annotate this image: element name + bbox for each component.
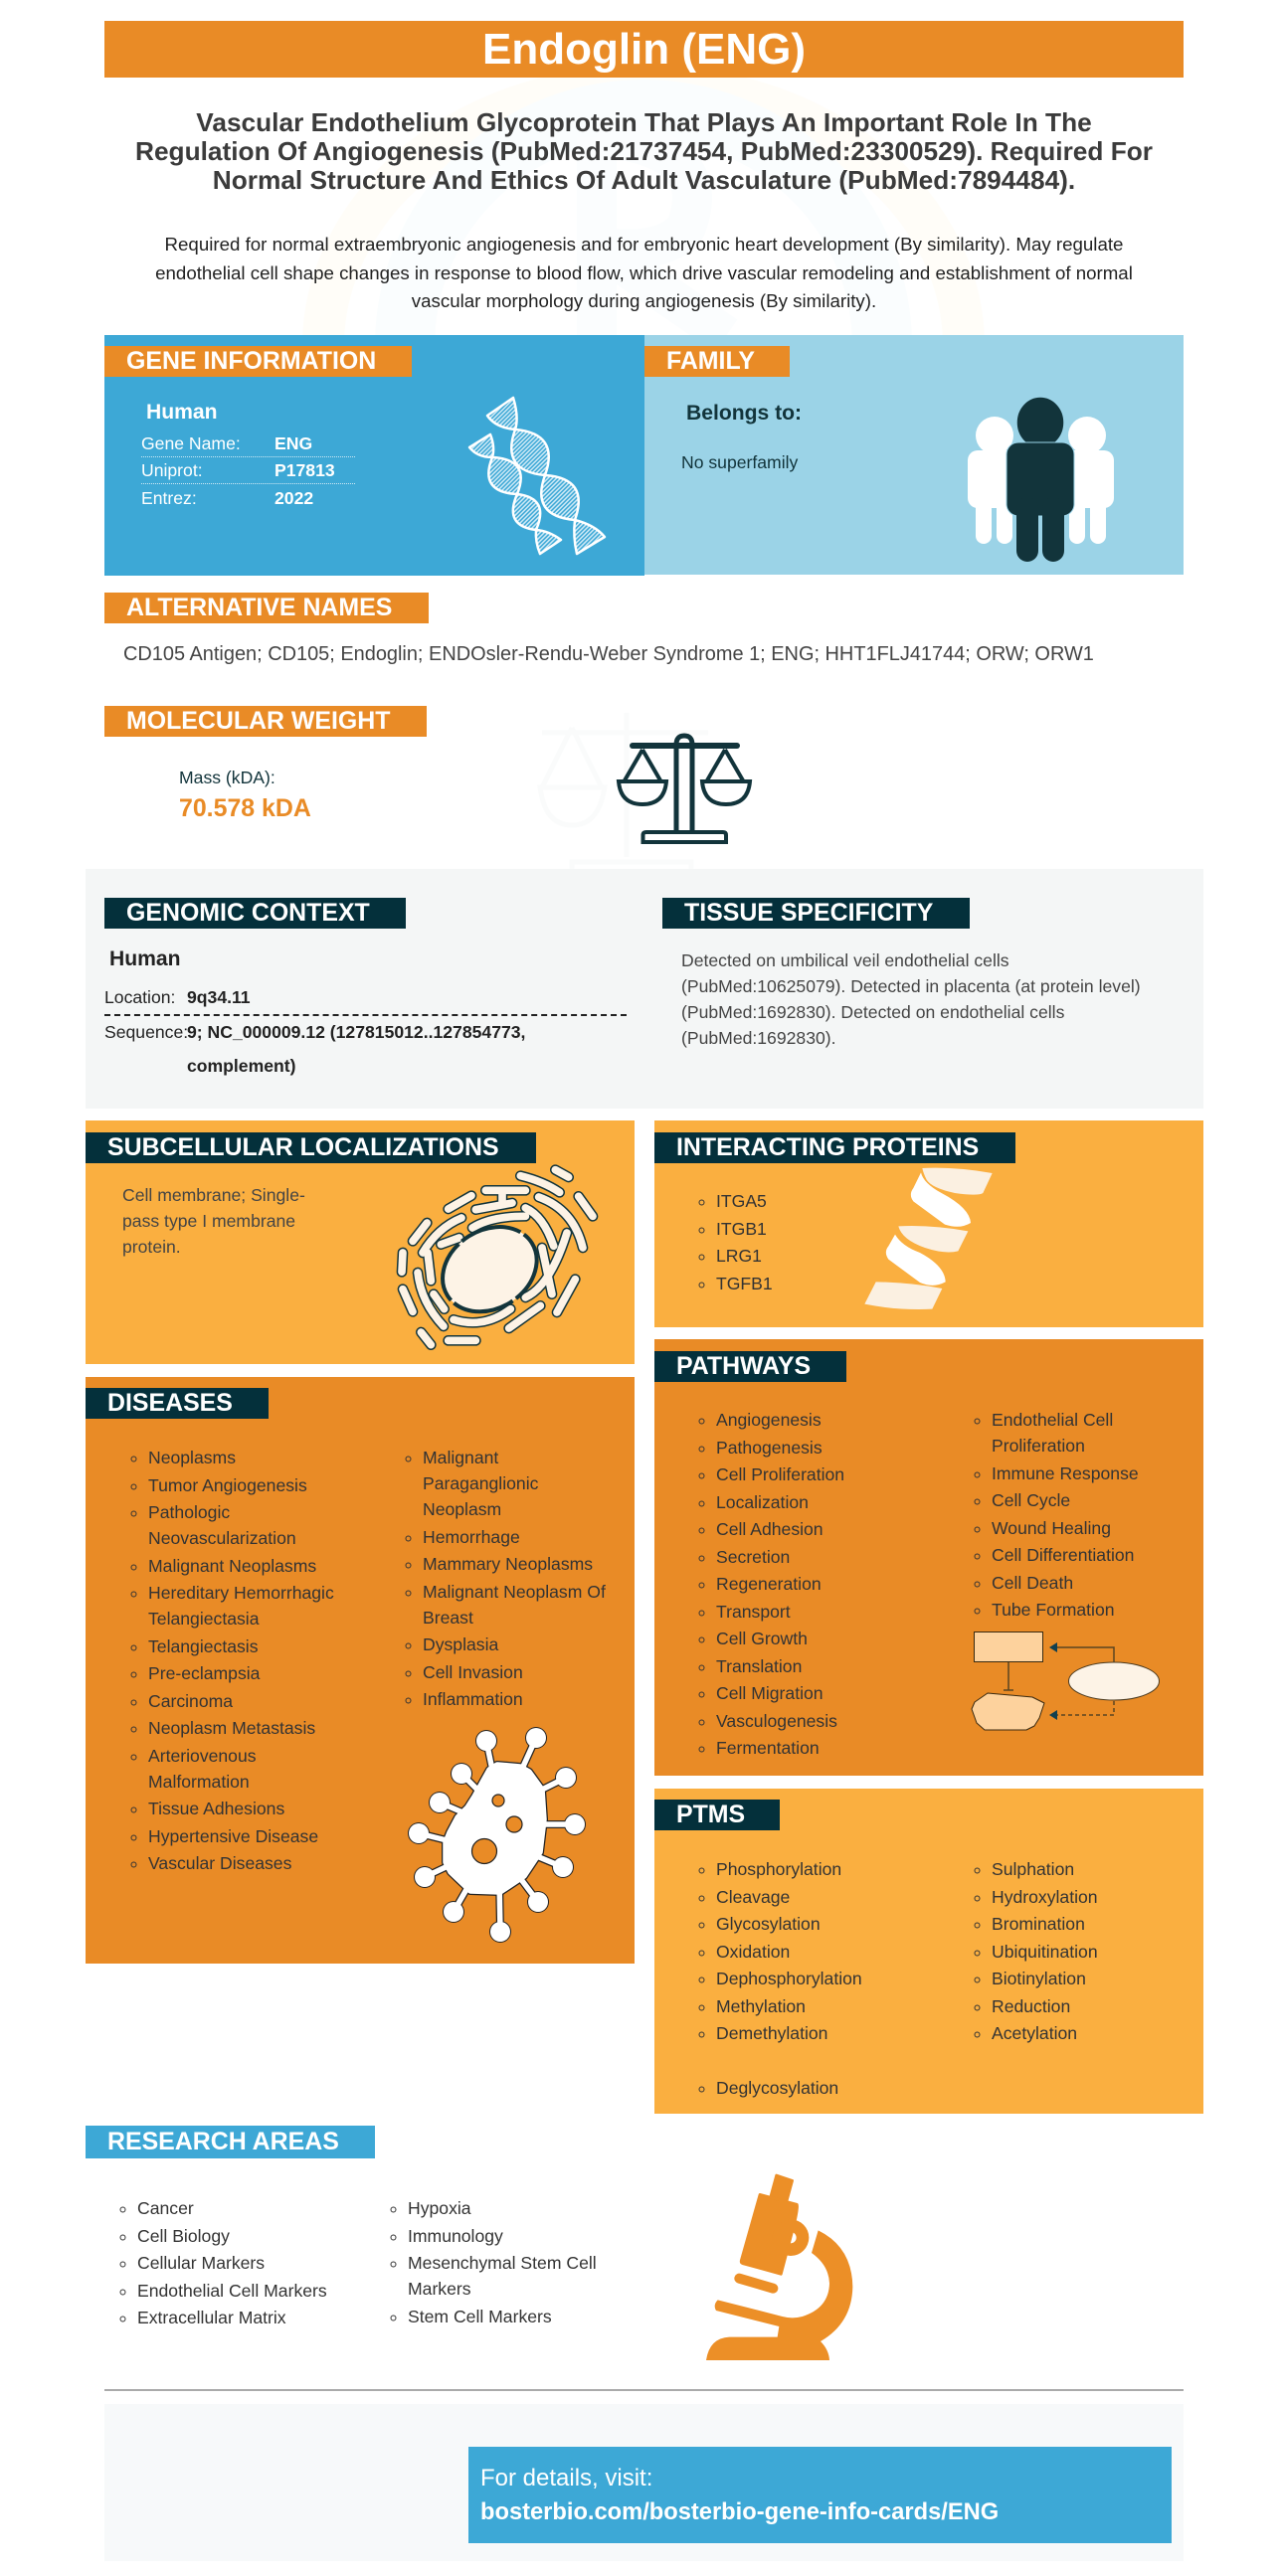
panel: ptms — [654, 1789, 1203, 2114]
heading: research areas — [86, 2126, 375, 2158]
uniprot row: P17813 — [274, 460, 335, 480]
diseases list column 2 — [406, 1448, 606, 1709]
description paragraph — [155, 234, 1133, 311]
alternative names text: CD105 Antigen; CD105; Endoglin; ENDOsler-Rendu-Weber Syndrome 1; ENG; HHT1FLJ41744; ORW; ORW1 — [123, 643, 1094, 665]
localization text: Cell membrane; Single- — [122, 1185, 305, 1205]
diseases list column 1: Malignant Neoplasms — [148, 1555, 316, 1575]
callout: details link — [468, 2447, 1172, 2543]
ptms list column 1: Glycosylation — [716, 1914, 821, 1934]
icon: protein ribbon — [864, 1167, 993, 1309]
research areas list column 2: Hypoxia — [408, 2198, 471, 2218]
research areas list column 1: Extracellular Matrix — [137, 2308, 286, 2327]
pathways list column 1: Angiogenesis — [716, 1410, 822, 1430]
heading: alternative names: ALTERNATIVE NAMES — [126, 594, 392, 621]
pathways list column 1: Secretion — [716, 1547, 790, 1567]
description paragraph: vascular morphology during angiogenesis (By similarity). — [412, 290, 876, 311]
location row — [104, 987, 251, 1007]
ptms list column 1: Dephosphorylation — [716, 1969, 862, 1988]
species label: Human — [146, 401, 218, 424]
pathways list column 1 — [698, 1410, 844, 1758]
diseases list column 1 — [131, 1448, 334, 1873]
title: Endoglin (ENG) — [482, 25, 806, 74]
ptms list column 2: Bromination — [992, 1914, 1085, 1934]
icon: virus — [408, 1727, 586, 1943]
entrez row: 2022 — [274, 488, 313, 508]
tissue specificity text: (PubMed:1692830). Detected on endothelial cells — [681, 1002, 1064, 1022]
interacting proteins list: ITGA5 — [716, 1191, 767, 1211]
interacting proteins list: ITGB1 — [716, 1219, 767, 1239]
tissue specificity text: (PubMed:1692830). — [681, 1028, 836, 1048]
gene name row: ENG — [274, 433, 312, 453]
subtitle: Regulation Of Angiogenesis (PubMed:21737454, PubMed:23300529). Required For — [135, 136, 1153, 166]
diseases list column 1: Vascular Diseases — [148, 1853, 291, 1873]
ptms list column 2: Acetylation — [992, 2023, 1077, 2043]
ptms list column 2: Sulphation — [992, 1859, 1074, 1879]
heading: genomic context: GENOMIC CONTEXT — [126, 899, 370, 927]
research areas list column 2: Stem Cell Markers — [408, 2307, 552, 2326]
uniprot row: Uniprot: — [141, 460, 203, 480]
pathways list column 1: Cell Growth — [716, 1629, 808, 1648]
icon: endoplasmic reticulum and nucleus — [396, 1164, 599, 1350]
tissue specificity text: (PubMed:10625079). Detected in placenta (at protein level) — [681, 976, 1141, 996]
panel: gene information — [104, 335, 644, 576]
heading: tissue specificity: TISSUE SPECIFICITY — [684, 899, 933, 927]
ptms list column 1: Methylation — [716, 1996, 806, 2016]
uniprot row — [141, 457, 355, 484]
diseases list column 2: Malignant Neoplasm Of — [423, 1581, 606, 1601]
interacting proteins list: LRG1 — [716, 1246, 762, 1266]
pathways list column 2: Cell Differentiation — [992, 1545, 1134, 1565]
visit label: For details, visit: — [480, 2465, 652, 2491]
gene name row: Gene Name: — [141, 433, 241, 453]
diseases list column 2: Paraganglionic — [423, 1473, 538, 1493]
ptms list column 2: Biotinylation — [992, 1969, 1086, 1988]
diseases list column 1: Telangiectasia — [148, 1609, 259, 1629]
mass value: 70.578 kDA — [179, 794, 311, 822]
pathways list column 2: Immune Response — [992, 1463, 1139, 1483]
sequence row: 9; NC_000009.12 (127815012..127854773, — [187, 1022, 525, 1042]
diseases list column 1: Telangiectasis — [148, 1636, 259, 1656]
diseases list column 2: Malignant — [423, 1448, 498, 1467]
heading: subcellular localizations: SUBCELLULAR LOCALIZATIONS — [107, 1133, 499, 1161]
diseases list column 1: Tumor Angiogenesis — [148, 1475, 307, 1495]
research areas list column 2 — [390, 2198, 597, 2326]
localization text: pass type I membrane — [122, 1211, 295, 1231]
icon: balance scale — [617, 734, 752, 844]
ptms list column 2 — [975, 1859, 1098, 2043]
pathways list column 2: Cell Death — [992, 1573, 1073, 1593]
diseases list column 2: Hemorrhage — [423, 1527, 520, 1547]
panel: family — [644, 335, 1184, 575]
diseases list column 1: Pre-eclampsia — [148, 1663, 260, 1683]
tissue specificity text — [681, 950, 1141, 1048]
interacting proteins list: TGFB1 — [716, 1273, 773, 1292]
icon: people — [968, 398, 1114, 562]
subtitle: Vascular Endothelium Glycoprotein That Plays An Important Role In The — [196, 107, 1092, 137]
diseases list column 1: Arteriovenous — [148, 1746, 257, 1766]
gene name row — [141, 430, 355, 457]
panel: subcellular localizations — [86, 1120, 635, 1364]
watermark scale — [537, 708, 721, 869]
diseases list column 1: Neoplasms — [148, 1448, 236, 1467]
entrez row: Entrez: — [141, 488, 197, 508]
research areas list column 1: Cellular Markers — [137, 2253, 265, 2273]
heading: family: FAMILY — [666, 347, 755, 375]
background watermark logo — [298, 78, 995, 336]
pathways list column 1: Localization — [716, 1491, 809, 1511]
research areas list column 2: Markers — [408, 2279, 471, 2299]
localization text — [122, 1185, 305, 1257]
sequence row — [104, 1022, 525, 1076]
ptms list column 1: Demethylation — [716, 2023, 827, 2043]
heading: diseases — [86, 1388, 269, 1419]
pathways list column 1: Cell Proliferation — [716, 1464, 844, 1484]
pathways list column 1: Pathogenesis — [716, 1438, 823, 1458]
ptms list column 2: Reduction — [992, 1996, 1070, 2016]
heading: diseases: DISEASES — [107, 1389, 233, 1417]
heading: molecular weight: MOLECULAR WEIGHT — [126, 707, 390, 735]
diseases list column 2: Breast — [423, 1607, 473, 1627]
diseases list column 2: Mammary Neoplasms — [423, 1554, 593, 1574]
pathways list column 1: Transport — [716, 1601, 791, 1621]
family value: No superfamily — [681, 452, 798, 472]
icon: microscope — [706, 2173, 853, 2360]
pathways list column 2: Wound Healing — [992, 1517, 1111, 1537]
research areas list column 1: Cell Biology — [137, 2225, 230, 2245]
research areas list column 1: Endothelial Cell Markers — [137, 2281, 327, 2301]
pathways list column 1: Fermentation — [716, 1738, 820, 1758]
diseases list column 1: Hereditary Hemorrhagic — [148, 1583, 334, 1603]
sequence row: complement) — [187, 1056, 296, 1076]
ptms list column 1: Deglycosylation — [716, 2078, 838, 2098]
panel: genomic context and tissue specificity — [86, 869, 1203, 1109]
heading: ptms: PTMS — [676, 1801, 745, 1828]
tissue specificity text: Detected on umbilical veil endothelial cells — [681, 950, 1009, 970]
pathways list column 1: Regeneration — [716, 1574, 822, 1594]
divider — [104, 2389, 1184, 2391]
ptms list column 1: Oxidation — [716, 1941, 790, 1961]
location row: Location: — [104, 987, 175, 1007]
heading: research areas: RESEARCH AREAS — [107, 2128, 339, 2155]
pathways list column 2: Tube Formation — [992, 1600, 1115, 1620]
dashed divider — [104, 1014, 627, 1016]
title — [104, 21, 1184, 78]
heading: gene information: GENE INFORMATION — [126, 347, 376, 375]
panel: genomic context and tissue specificity: 9q34.11 — [187, 987, 251, 1007]
ptms list column 1 — [698, 1859, 862, 2098]
diseases list column 2: Inflammation — [423, 1689, 523, 1709]
description paragraph: endothelial cell shape changes in response to blood flow, which drive vascular remodeling and establishment of normal — [155, 262, 1133, 282]
interacting proteins list — [698, 1191, 773, 1292]
heading: pathways: PATHWAYS — [676, 1352, 811, 1380]
diseases list column 1: Tissue Adhesions — [148, 1799, 284, 1818]
ptms list column 1: Phosphorylation — [716, 1859, 841, 1879]
sequence row: Sequence: — [104, 1022, 188, 1042]
icon: dna — [467, 396, 607, 555]
pathways list column 2: Cell Cycle — [992, 1490, 1070, 1510]
pathways list column 1: Vasculogenesis — [716, 1710, 837, 1730]
subtitle — [135, 107, 1153, 195]
diseases list column 1: Pathologic — [148, 1502, 230, 1522]
heading: ptms — [654, 1800, 780, 1830]
heading: interacting proteins: INTERACTING PROTEINS — [676, 1133, 979, 1161]
diseases list column 2: Neoplasm — [423, 1499, 501, 1519]
belongs to label: Belongs to: — [686, 402, 802, 425]
subtitle: Normal Structure And Ethics Of Adult Vasculature (PubMed:7894484). — [213, 165, 1075, 195]
pathways list column 2 — [975, 1410, 1139, 1620]
species label: Human — [109, 947, 181, 970]
panel: pathways — [654, 1339, 1203, 1776]
url: bosterbio.com/bosterbio-gene-info-cards/ENG — [480, 2499, 999, 2525]
ptms list column 2: Ubiquitination — [992, 1941, 1098, 1961]
research areas list column 2: Mesenchymal Stem Cell — [408, 2253, 597, 2273]
research areas list column 2: Immunology — [408, 2225, 503, 2245]
diseases list column 1: Neovascularization — [148, 1528, 296, 1548]
pathways list column 1: Cell Migration — [716, 1683, 824, 1703]
diseases list column 1: Malformation — [148, 1772, 250, 1792]
diseases list column 2: Dysplasia — [423, 1634, 498, 1654]
panel: diseases — [86, 1377, 635, 1964]
diseases list column 1: Hypertensive Disease — [148, 1825, 318, 1845]
icon: pathway diagram — [971, 1631, 1160, 1730]
heading: family — [644, 346, 790, 377]
description paragraph: Required for normal extraembryonic angiogenesis and for embryonic heart development (By similarity). May regulate — [165, 234, 1123, 255]
diseases list column 1: Neoplasm Metastasis — [148, 1718, 315, 1738]
heading: pathways — [654, 1351, 846, 1382]
entrez row — [141, 488, 313, 508]
panel: interacting proteins — [654, 1120, 1203, 1327]
panel: footer — [104, 2404, 1184, 2561]
ptms list column 2: Hydroxylation — [992, 1887, 1098, 1907]
localization text: protein. — [122, 1237, 181, 1257]
research areas list column 1: Cancer — [137, 2198, 194, 2218]
pathways list column 2: Endothelial Cell — [992, 1410, 1113, 1430]
diseases list column 2: Cell Invasion — [423, 1662, 523, 1682]
pathways list column 2: Proliferation — [992, 1436, 1085, 1456]
pathways list column 1: Translation — [716, 1656, 802, 1676]
ptms list column 1: Cleavage — [716, 1887, 790, 1907]
research areas list column 1 — [119, 2198, 327, 2327]
mass label: Mass (kDA): — [179, 768, 275, 787]
diseases list column 1: Carcinoma — [148, 1690, 233, 1710]
pathways list column 1: Cell Adhesion — [716, 1519, 824, 1539]
